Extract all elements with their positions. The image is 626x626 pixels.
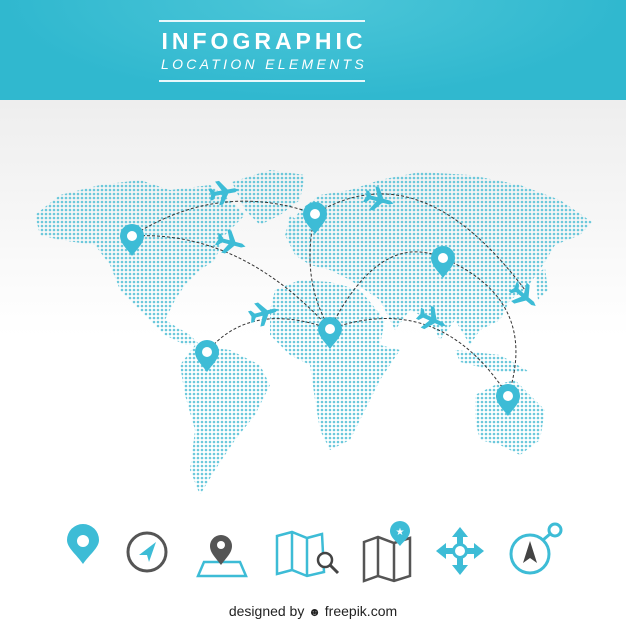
icon: map pin on map [198,535,246,576]
planes [207,178,543,337]
title: INFOGRAPHIC [162,28,366,54]
icon: map search [277,532,338,576]
icon: map with star pin: ★ [396,527,405,538]
icon: navigation [511,524,561,573]
continents [35,170,592,495]
icon row [67,521,562,583]
location pins [120,202,520,416]
icon: pin [67,524,99,564]
icon: move arrows [436,527,484,575]
title: LOCATION ELEMENTS [161,56,367,72]
title [159,20,365,82]
footer credit: designed by ☻ freepik.com [229,603,397,619]
flight routes [132,194,525,396]
icon: compass [128,533,166,571]
icon: map with star pin [364,521,410,581]
header banner [0,0,626,100]
